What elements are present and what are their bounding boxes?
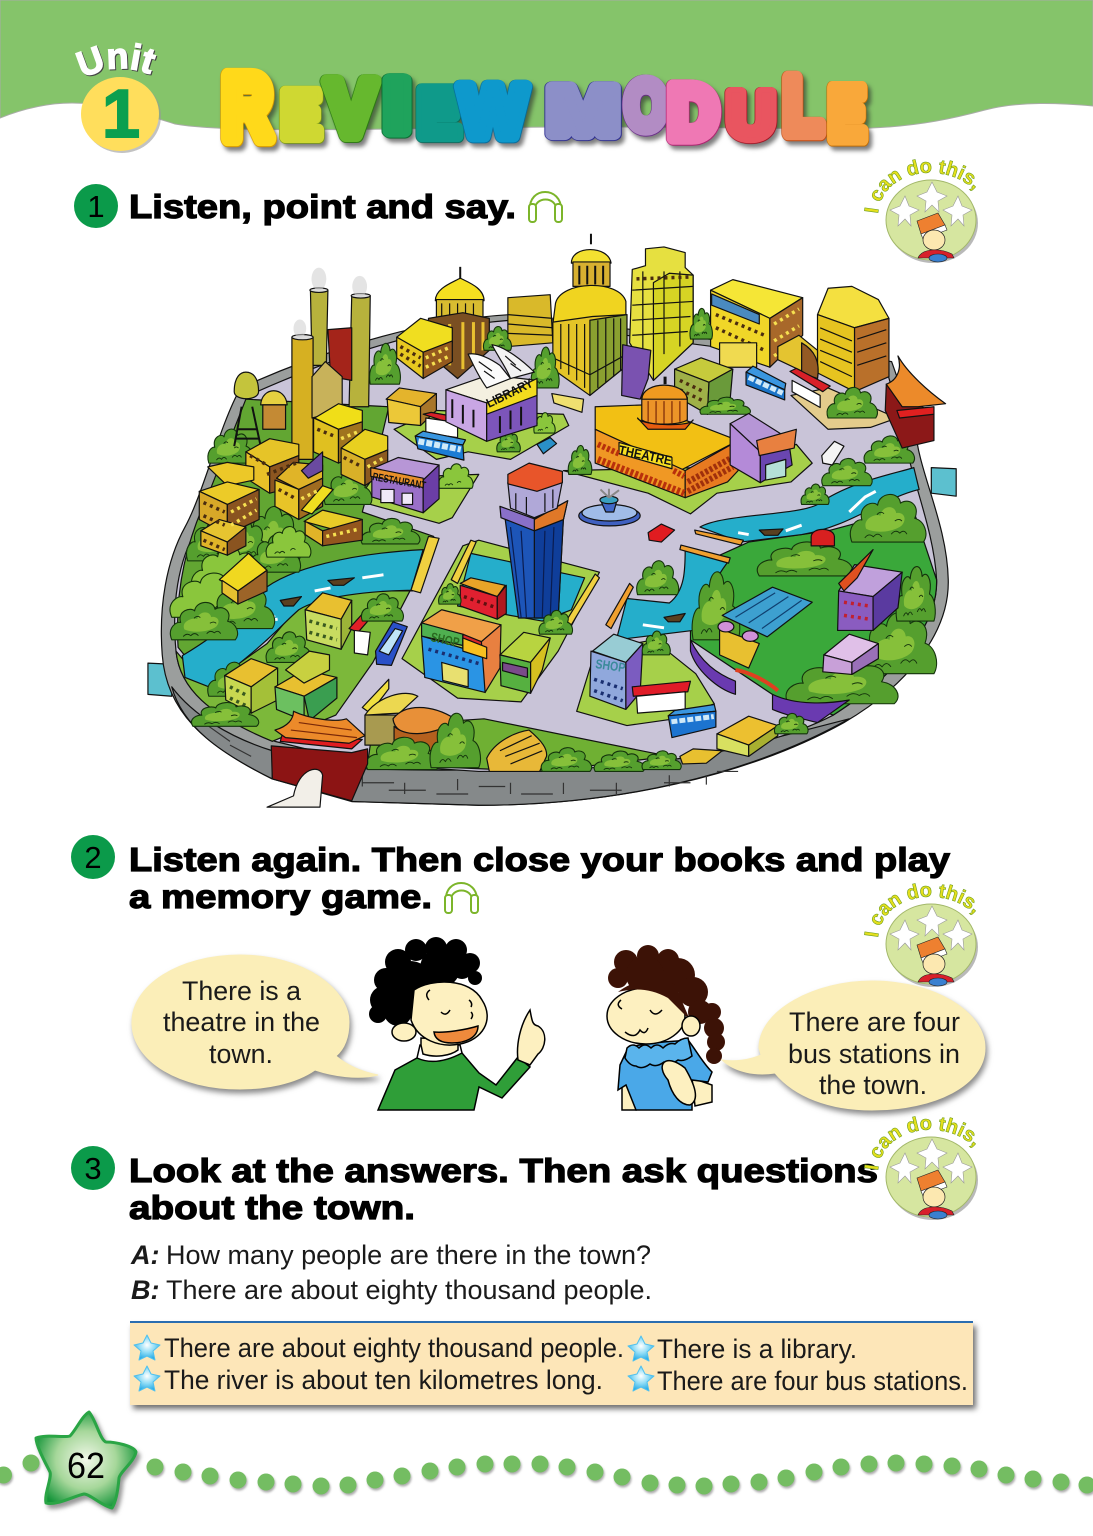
- speech bubble: left: town.: [209, 1039, 273, 1069]
- domed tower: [552, 234, 627, 412]
- page title: REVIEW MODULE: W: [460, 72, 526, 152]
- fountain: [579, 489, 640, 526]
- bridges: [411, 530, 743, 629]
- river stubs outside the wall: [148, 468, 956, 696]
- page title: REVIEW MODULE: E: [281, 78, 321, 152]
- section 2 number: 2: [84, 840, 102, 875]
- shop building: [422, 610, 501, 692]
- I can do this badge 2: I can do this,: [864, 883, 976, 937]
- section 3 heading: [129, 1152, 878, 1226]
- factory buildings: [199, 404, 388, 604]
- white bus stop back right: [790, 368, 830, 407]
- right park features: [690, 494, 937, 723]
- blue bus near library: [415, 431, 466, 460]
- icon: headphones: [445, 883, 478, 913]
- right gate: [885, 356, 946, 448]
- centre moat: [458, 553, 585, 621]
- section 2 number: [71, 835, 115, 879]
- bottom houses: [362, 679, 547, 771]
- I can do this badge 3: I can do this,: [864, 1116, 976, 1170]
- answer box: The river is about ten kilometres long.: [164, 1365, 603, 1395]
- map label: restaurant: RESTAURANT: [371, 471, 427, 492]
- blue car: [537, 438, 557, 454]
- page title: REVIEW MODULE: R: [222, 57, 272, 157]
- cinema: [730, 413, 796, 483]
- right river: [700, 468, 919, 542]
- section 3 number: 3: [84, 1151, 102, 1186]
- page title: REVIEW MODULE: I: [384, 65, 410, 147]
- library building: [446, 345, 537, 441]
- section 3 heading: Look at the answers. Then ask questions: [129, 1152, 878, 1189]
- lime shop: [500, 632, 550, 693]
- I can do this badge 3: [864, 1116, 978, 1220]
- section 2 heading: a memory game.: [129, 878, 432, 915]
- white car: [822, 441, 844, 465]
- tall yellow grid tower: [630, 247, 693, 380]
- model dialogue: [130, 1240, 652, 1305]
- speech bubble: left: [132, 955, 378, 1089]
- centre blue tower: [500, 463, 568, 618]
- speech bubble: right: There are four: [789, 1007, 960, 1037]
- speech bubble: right: [722, 981, 985, 1110]
- section 3 heading: about the town.: [129, 1189, 415, 1226]
- section 1 number: 1: [87, 189, 105, 224]
- page title: REVIEW MODULE: O: [625, 68, 667, 145]
- small yellow house with bus stop: [386, 388, 463, 438]
- blue bus front: [668, 705, 716, 738]
- small purple building: [622, 345, 651, 399]
- blue bus back right: [746, 366, 786, 400]
- green districts: [176, 388, 937, 771]
- shop two: [590, 634, 643, 709]
- page title: REVIEW MODULE: E: [828, 72, 866, 155]
- page number star: [36, 1412, 136, 1508]
- trees around shops: [439, 561, 679, 634]
- answer box: There are four bus stations.: [657, 1366, 968, 1396]
- character: boy: [369, 937, 545, 1110]
- boats: [280, 529, 783, 622]
- character: girl: [607, 945, 725, 1110]
- page number star: 62: [67, 1445, 105, 1486]
- header: green wavy banner: [0, 0, 1093, 130]
- map label: shop: SHOP: [429, 629, 461, 650]
- model dialogue: How many people are there in the town?: [166, 1240, 651, 1270]
- model dialogue: B:: [131, 1275, 160, 1305]
- answer box: There are about eighty thousand people.: [164, 1333, 624, 1363]
- left river: [182, 550, 423, 687]
- water towers: [234, 372, 287, 446]
- bottom right houses: [680, 716, 778, 764]
- map label: theatre: THEATRE: [617, 442, 674, 468]
- town ground and roads: [175, 320, 937, 771]
- theatre: [595, 377, 738, 498]
- town wall: [161, 315, 948, 805]
- unit badge: Unit: [75, 42, 158, 76]
- I can do this badge 1: I can do this,: [864, 159, 976, 213]
- icon: blue stars: [134, 1335, 654, 1391]
- trees: [170, 308, 914, 640]
- speech bubble: right: the town.: [819, 1070, 927, 1100]
- factory: chimneys: [292, 288, 370, 459]
- page title: REVIEW MODULE: M: [547, 73, 619, 149]
- trees along bottom: [366, 631, 808, 771]
- I can do this badge 2: [864, 883, 978, 987]
- map label: library: LIBRARY: [484, 375, 536, 411]
- restaurant: [371, 457, 439, 513]
- red building: [460, 578, 506, 619]
- model dialogue: A:: [130, 1240, 160, 1270]
- section 1 heading: Listen, point and say.: [129, 188, 516, 225]
- icon: headphones: [529, 192, 562, 222]
- section 2 heading: [129, 841, 951, 915]
- speech bubble: left: There is a: [182, 976, 302, 1006]
- smoke: [293, 268, 367, 338]
- page title: REVIEW MODULE: U: [727, 79, 775, 151]
- model dialogue: There are about eighty thousand people.: [166, 1275, 652, 1305]
- city map illustration: [148, 234, 956, 807]
- speech bubble: right: bus stations in: [788, 1039, 960, 1069]
- trees lower left: [192, 594, 403, 726]
- page title: REVIEW MODULE: V: [326, 65, 376, 152]
- page title: REVIEW MODULE: E: [418, 74, 460, 150]
- section 3 number: [71, 1146, 115, 1190]
- answer box: There is a library.: [657, 1334, 857, 1364]
- page title: REVIEW MODULE: [222, 57, 866, 157]
- bottom gate: [267, 711, 368, 807]
- section 2 heading: Listen again. Then close your books and play: [129, 841, 951, 878]
- lower canal: [616, 550, 729, 640]
- section 1 number: [74, 184, 118, 228]
- page title: REVIEW MODULE: D: [668, 71, 718, 155]
- I can do this badge 1: [864, 159, 978, 263]
- olive domed building: [675, 358, 733, 414]
- speech bubble: left: theatre in the: [163, 1007, 320, 1037]
- back buildings: [397, 267, 889, 392]
- red car: [648, 524, 675, 542]
- answer box: [130, 1321, 973, 1405]
- lower left houses: [208, 593, 407, 721]
- footer dotted wave: [0, 1454, 1093, 1494]
- unit badge: [75, 42, 161, 153]
- map label: shop two: SHOP: [595, 656, 627, 675]
- bus stop two: [632, 681, 690, 713]
- unit badge: 1: [102, 76, 140, 152]
- page title: REVIEW MODULE: L: [783, 61, 823, 151]
